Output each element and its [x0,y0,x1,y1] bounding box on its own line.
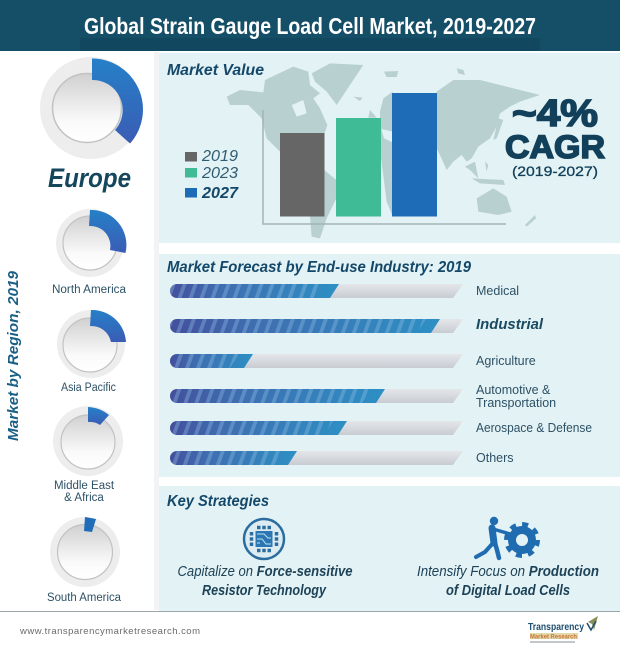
label: Europe: Europe [48,163,131,193]
chart axes [263,110,506,224]
label: South America: South America [47,592,122,604]
heading: market forecast: Market Forecast by End-use Industry: 2019 [167,259,471,276]
footer rule [0,611,620,612]
bar: automotive and transportation: Transportation [476,396,556,410]
bar: industrial [170,316,544,333]
callout: CAGR: CAGR [505,129,605,165]
left column shadow [154,52,159,610]
label: Middle East and Africa [54,480,115,504]
logo: Transparency Market Research [528,616,598,643]
world map [227,63,540,238]
label: Asia Pacific: Asia Pacific [61,382,116,394]
footer url: www.transparencymarketresearch.com [19,626,200,637]
panel: market forecast [159,254,620,477]
bar 2023 [336,118,381,216]
donut: Asia Pacific [57,310,126,378]
logo: Transparency Market Research: Transparency [528,621,584,633]
header banner [0,0,620,51]
bar: agriculture [170,354,536,368]
label: Middle East and Africa: & Africa [64,492,104,504]
bar: medical [170,284,519,298]
label: North America: North America [52,284,127,296]
title: Global Strain Gauge Load Cell Market, 2019-2027 [84,13,536,39]
donut: Europe [40,57,143,159]
icon: microchip [244,519,284,559]
bar: medical: Medical [476,284,519,298]
label: Middle East and Africa: Middle East [54,480,115,492]
bar: automotive and transportation [170,383,556,410]
bar: others [170,451,514,465]
bar: aerospace and defense [170,421,592,435]
donut: North America [56,209,126,277]
donut: South America [50,517,120,587]
bar 2027 [392,93,437,216]
callout: CAGR: ~4% [512,93,598,135]
strategy text: digital load cells: Intensify Focus on Production [417,564,599,580]
strategy text: force-sensitive resistor: Capitalize on Force-sensitive [178,564,352,580]
legend [185,148,239,202]
bar 2019 [280,133,324,216]
callout: CAGR [505,93,605,179]
bar: aerospace and defense: Aerospace & Defense [476,421,592,435]
legend: 2027 [201,185,239,202]
strategy text: digital load cells [417,564,599,599]
panel: market value [159,53,620,243]
heading: market value: Market Value [167,62,264,79]
bar: agriculture: Agriculture [476,354,536,368]
bar: automotive and transportation: Automotive & [476,383,551,397]
bar: others: Others [476,451,514,465]
panel: key strategies [159,486,620,611]
heading: key strategies: Key Strategies [167,493,269,510]
bar: industrial: Industrial [476,316,544,333]
legend: 2019 [201,148,238,165]
vertical axis title: Market by Region, 2019 [5,270,22,441]
strategy text: force-sensitive resistor: Resistor Technology [202,583,327,599]
icon: person pushing gear [476,517,538,558]
logo: Transparency Market Research: Market Research [530,634,577,640]
strategy text: force-sensitive resistor [178,564,352,599]
strategy text: digital load cells: of Digital Load Cells [446,583,570,599]
callout: CAGR: (2019-2027) [512,163,598,179]
legend: 2023 [201,165,238,182]
donut: Middle East and Africa [53,406,123,476]
